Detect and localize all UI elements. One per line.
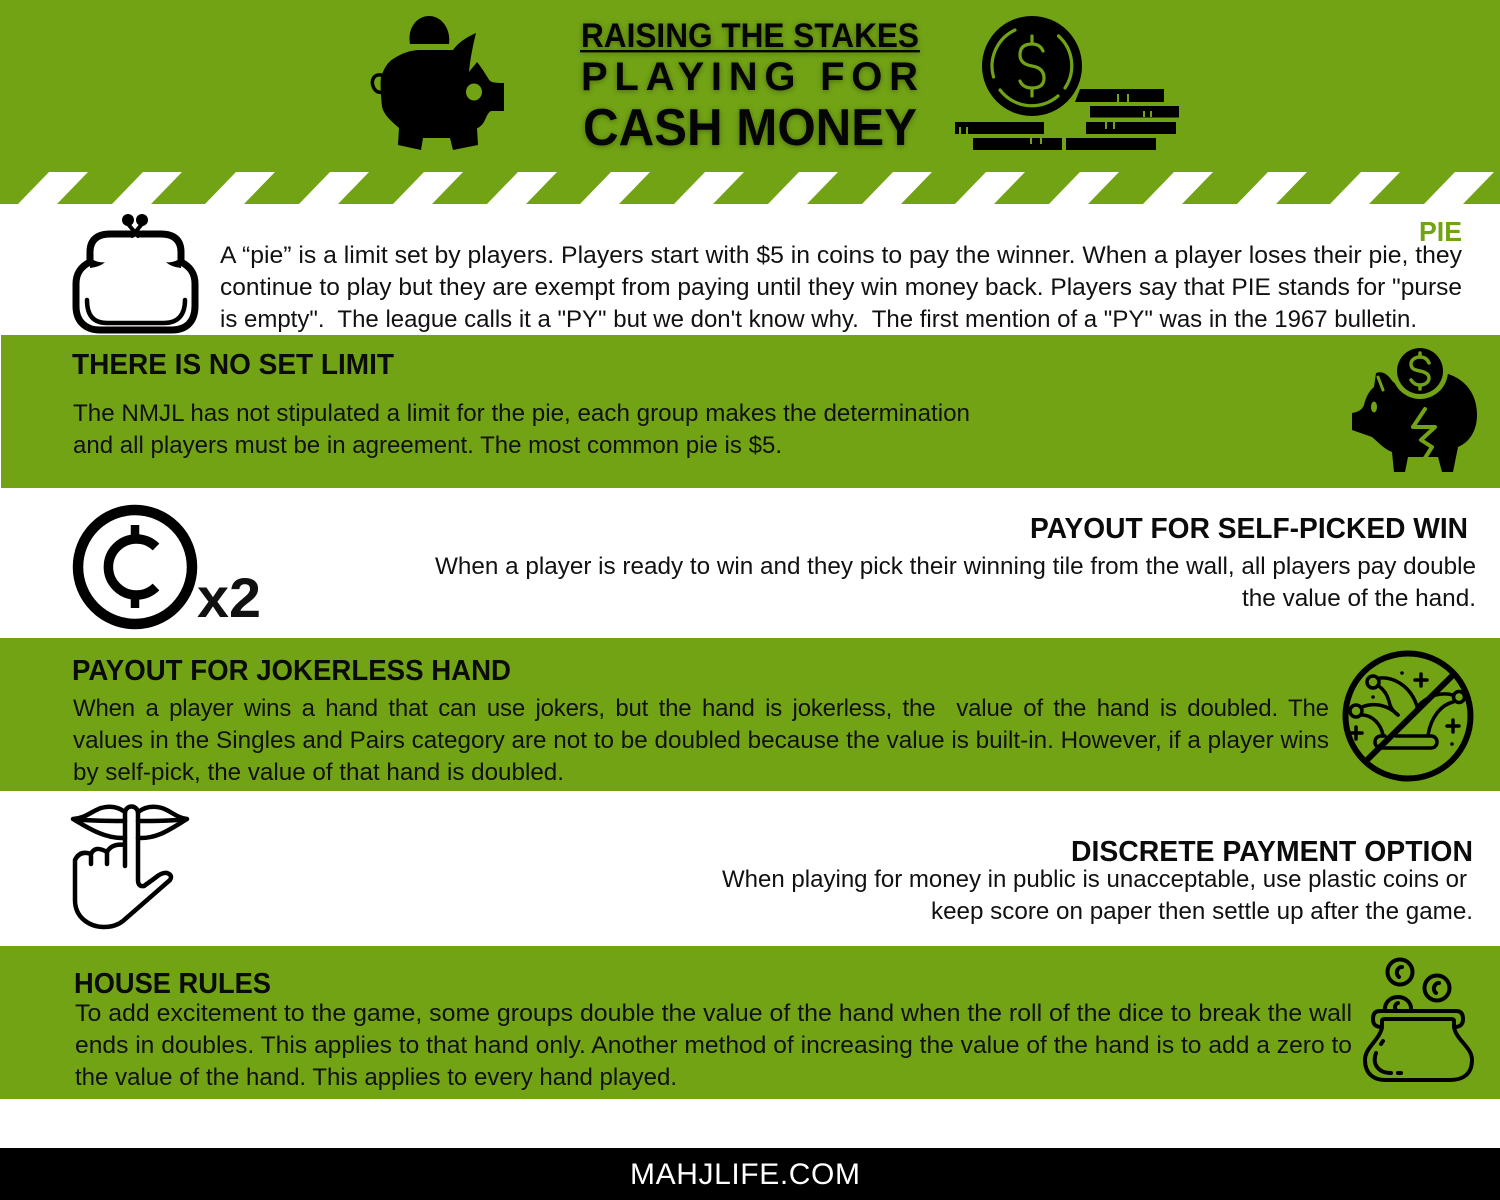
text block: pie: is empty". The league calls it a "PY" but we don't know why. The first mention of a "PY" was in the 1967 bulletin. <box>220 306 1417 333</box>
text block: self-picked win: the value of the hand. <box>1242 585 1476 612</box>
text block: jokerless hand: by self-pick, the value of that hand is doubled. <box>73 759 564 786</box>
icon: purse with coins <box>1365 960 1472 1080</box>
heading: discrete payment: DISCRETE PAYMENT OPTION <box>1071 836 1473 868</box>
title: PLAYING FOR <box>581 55 918 99</box>
heading: no set limit: THERE IS NO SET LIMIT <box>72 349 394 381</box>
panel: house rules <box>0 946 1500 1099</box>
title: CASH MONEY <box>583 99 917 157</box>
icon: broken piggy bank <box>1352 343 1477 472</box>
icon: hush finger over lips <box>73 806 187 927</box>
icon: dollar coin and coin stacks <box>955 16 1179 150</box>
icon: coin purse <box>76 214 195 330</box>
heading: self-picked win: PAYOUT FOR SELF-PICKED WIN <box>1030 513 1468 545</box>
panel: jokerless hand <box>0 638 1500 791</box>
icon: cent coin times two: x2 <box>197 566 261 629</box>
text block: pie: continue to play but they are exempt from paying until they win money back. Players say that PIE stands for "purse <box>220 274 1462 301</box>
text block: discrete payment: When playing for money in public is unacceptable, use plastic coins or <box>722 866 1467 893</box>
text block: jokerless hand: values in the Singles and Pairs category are not to be doubled because the value is built-in. However, if a player wins <box>73 727 1329 754</box>
panel: footer <box>0 1148 1500 1200</box>
text block: jokerless hand: When a player wins a hand that can use jokers, but the hand is jokerless, the value of the hand is doubled. The <box>73 695 1329 722</box>
heading: house rules: HOUSE RULES <box>74 968 271 1000</box>
text block: self-picked win: When a player is ready to win and they pick their winning tile from the wall, all players pay double <box>435 553 1476 580</box>
text block: house rules: ends in doubles. This applies to that hand only. Another method of increasing the value of the hand is to add a zero to <box>75 1032 1352 1059</box>
text block: no set limit: The NMJL has not stipulated a limit for the pie, each group makes the determination <box>73 400 970 427</box>
text block: no set limit: and all players must be in agreement. The most common pie is $5. <box>73 432 782 459</box>
title <box>580 17 920 157</box>
text block: house rules: To add excitement to the game, some groups double the value of the hand when the roll of the dice to break the wall <box>75 1000 1352 1027</box>
footer site name: MAHJLIFE.COM <box>630 1158 860 1191</box>
heading: pie: PIE <box>1419 216 1462 247</box>
text block: jokerless hand <box>73 695 1329 786</box>
title: RAISING THE STAKES <box>581 17 919 55</box>
text block: house rules <box>75 1000 1352 1091</box>
text block: self-picked win <box>435 553 1476 612</box>
icon: cent coin times two <box>78 510 261 629</box>
text block: no set limit <box>73 400 970 459</box>
text block: discrete payment <box>722 866 1473 925</box>
panel: header banner <box>0 0 1500 204</box>
text block: house rules: the value of the hand. This applies to every hand played. <box>75 1064 677 1091</box>
icon: piggy bank with coin <box>372 16 504 150</box>
icon: no jokers <box>1346 654 1470 778</box>
heading: jokerless hand: PAYOUT FOR JOKERLESS HAND <box>72 655 511 687</box>
text block: pie <box>220 242 1462 333</box>
text block: discrete payment: keep score on paper then settle up after the game. <box>931 898 1473 925</box>
text block: pie: A “pie” is a limit set by players. Players start with $5 in coins to pay the winner. When a player loses their pie, they <box>220 242 1462 269</box>
panel: pie definition <box>76 214 1462 333</box>
panel: there is no set limit <box>1 335 1500 488</box>
panel: discrete payment <box>73 806 1473 927</box>
panel: self-picked win <box>78 510 1476 629</box>
